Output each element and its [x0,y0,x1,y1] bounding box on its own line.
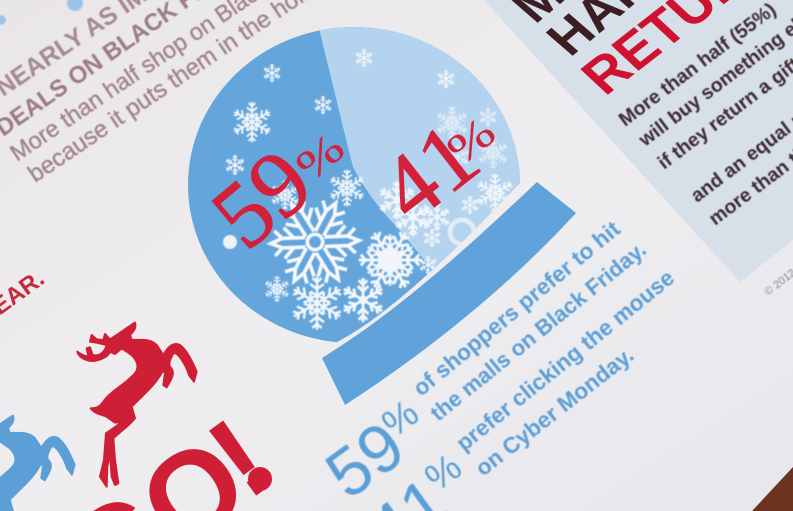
41 percent label: 41 [361,103,498,242]
41 percent label: % [437,107,504,174]
globe base [322,182,576,405]
59 percent label: 59 [193,129,331,269]
globe dark segment: 59% [188,27,520,343]
panel: happy returns heading [500,0,793,105]
caption line two: the malls on Black Friday. [425,237,651,426]
59 percent sign: % [375,392,427,446]
icon: blue reindeer [0,416,75,511]
snow globe chart [188,10,576,405]
body line one: More than half (55%) [615,0,780,131]
caption: shoppers statistics [312,216,679,511]
caption line one: of shoppers prefer to hit [408,216,625,401]
top left blue snowflake decorations [0,0,83,25]
panel: gift returns background [484,0,793,282]
caption line three: prefer clicking the mouse [451,265,679,456]
wood table corner [752,467,793,511]
icon: red reindeer [77,323,197,487]
59 percent label: % [286,123,353,190]
globe light segment: 41% [320,27,520,270]
caption line four: on Cyber Monday. [471,342,638,481]
41 percent sign: % [418,446,470,500]
panel: black friday deals text [0,0,345,188]
snowflakes [223,49,514,330]
panel: returns body text [615,0,793,230]
big 59 percent: 59 [312,407,418,511]
